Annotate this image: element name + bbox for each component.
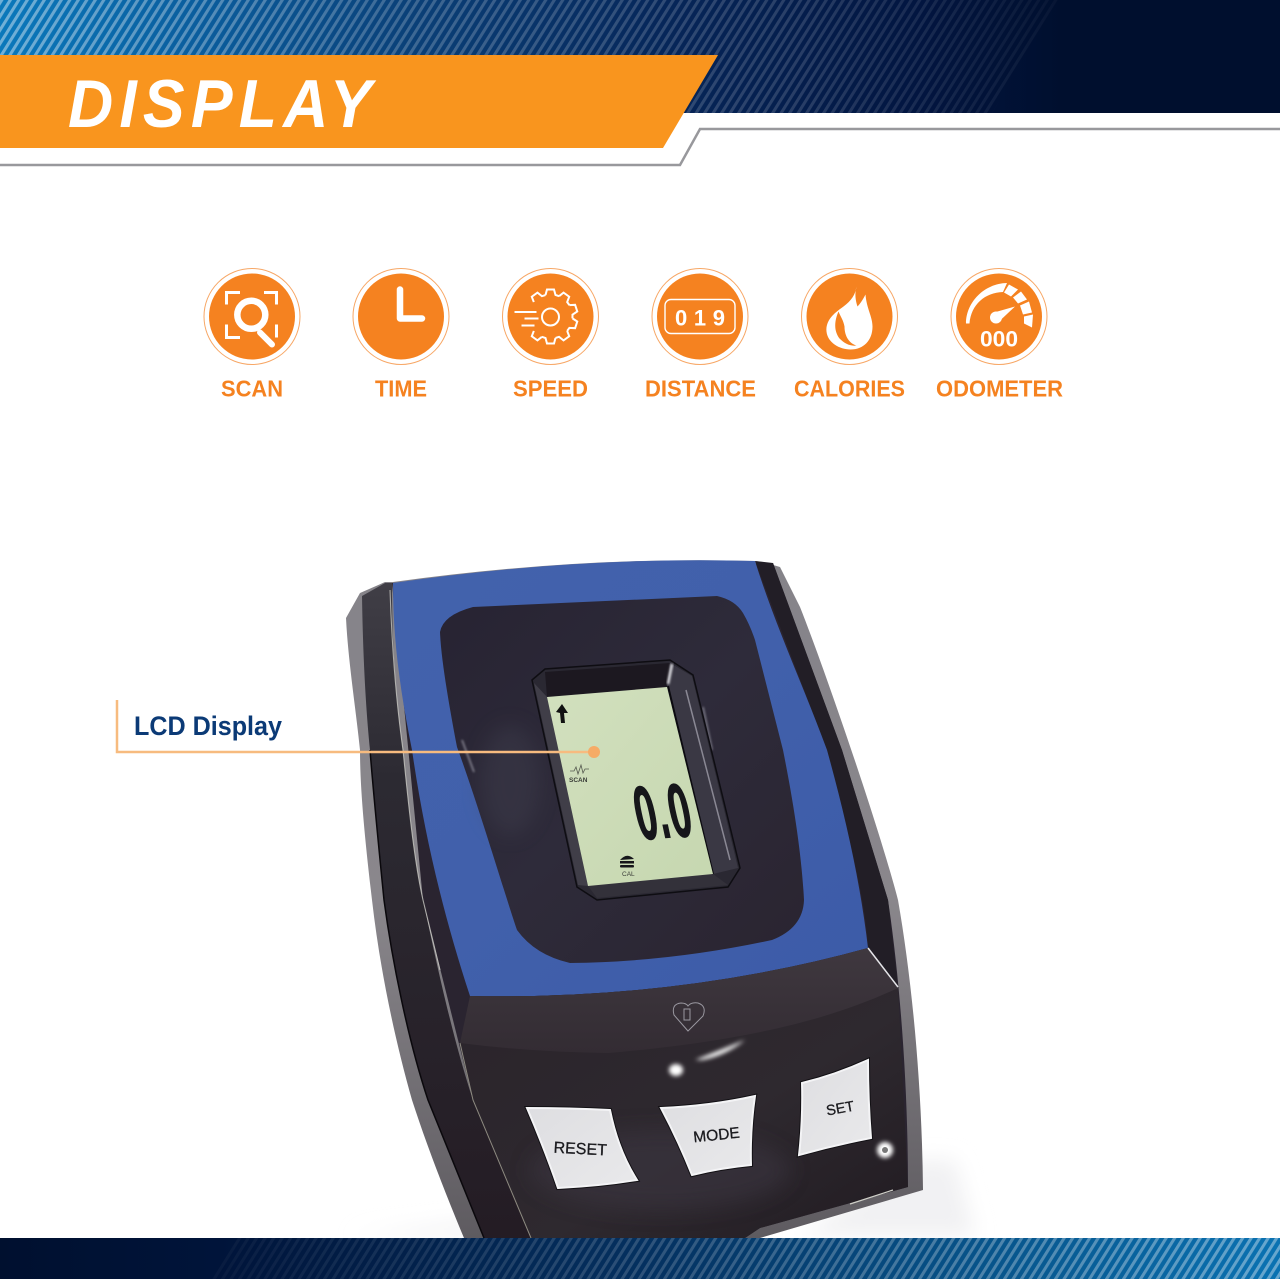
title: DISPLAY	[68, 66, 377, 142]
callout label: LCD Display	[134, 711, 282, 741]
inner dark body	[392, 563, 908, 1238]
icon: distance counter: 019	[675, 306, 725, 330]
upper band	[460, 948, 898, 1053]
scan indicator: SCAN	[569, 777, 588, 784]
console silver shell	[346, 560, 923, 1238]
LCD bezel	[532, 660, 740, 900]
heart logo	[673, 1003, 704, 1031]
well glare	[480, 725, 540, 835]
glare highlights	[669, 1040, 893, 1158]
button: mode: MODE	[693, 1125, 741, 1146]
callout: LCD Display	[117, 700, 600, 758]
label: scan: SCAN	[221, 376, 283, 402]
icon: odometer gauge	[951, 268, 1047, 364]
header banner	[0, 0, 1280, 113]
left edge highlight	[460, 1043, 531, 1238]
label: time: TIME	[375, 376, 427, 402]
label: odometer: ODOMETER	[936, 376, 1063, 402]
lower control panel	[460, 948, 908, 1238]
arrow indicator	[556, 704, 568, 723]
label: calories: CALORIES	[794, 376, 905, 402]
LCD screen	[547, 687, 713, 886]
well light streaks	[462, 707, 712, 772]
icon: speed gear	[502, 268, 598, 364]
icon: distance counter	[652, 268, 748, 364]
button: reset: RESET	[553, 1140, 608, 1159]
rail highlights	[390, 590, 440, 970]
feature icon row	[204, 268, 1063, 402]
blue faceplate	[393, 560, 868, 996]
scan indicator	[569, 765, 589, 784]
calorie indicator: CAL	[622, 871, 635, 878]
button: reset	[527, 1108, 637, 1188]
title banner	[0, 55, 1280, 165]
icon: scan	[204, 268, 300, 364]
footer banner	[0, 1238, 1280, 1279]
icon: odometer gauge: 000	[980, 326, 1018, 352]
label: speed: SPEED	[513, 376, 588, 402]
label: distance: DISTANCE	[645, 376, 756, 402]
right bevel highlight	[868, 948, 898, 987]
display well	[440, 596, 804, 963]
icon: calories flame	[802, 268, 898, 364]
left dark rail	[362, 583, 531, 1238]
button: mode	[661, 1096, 755, 1175]
console shadow	[350, 1160, 975, 1236]
icon: time	[353, 268, 449, 364]
button: set	[799, 1060, 871, 1155]
lower edge highlight	[850, 1190, 893, 1204]
LCD reading: 0.0	[626, 770, 700, 858]
right dark rail	[755, 561, 898, 987]
button: set: SET	[825, 1099, 856, 1119]
panel haze	[530, 1130, 790, 1210]
calorie indicator	[620, 856, 635, 878]
console photo	[346, 560, 923, 1238]
